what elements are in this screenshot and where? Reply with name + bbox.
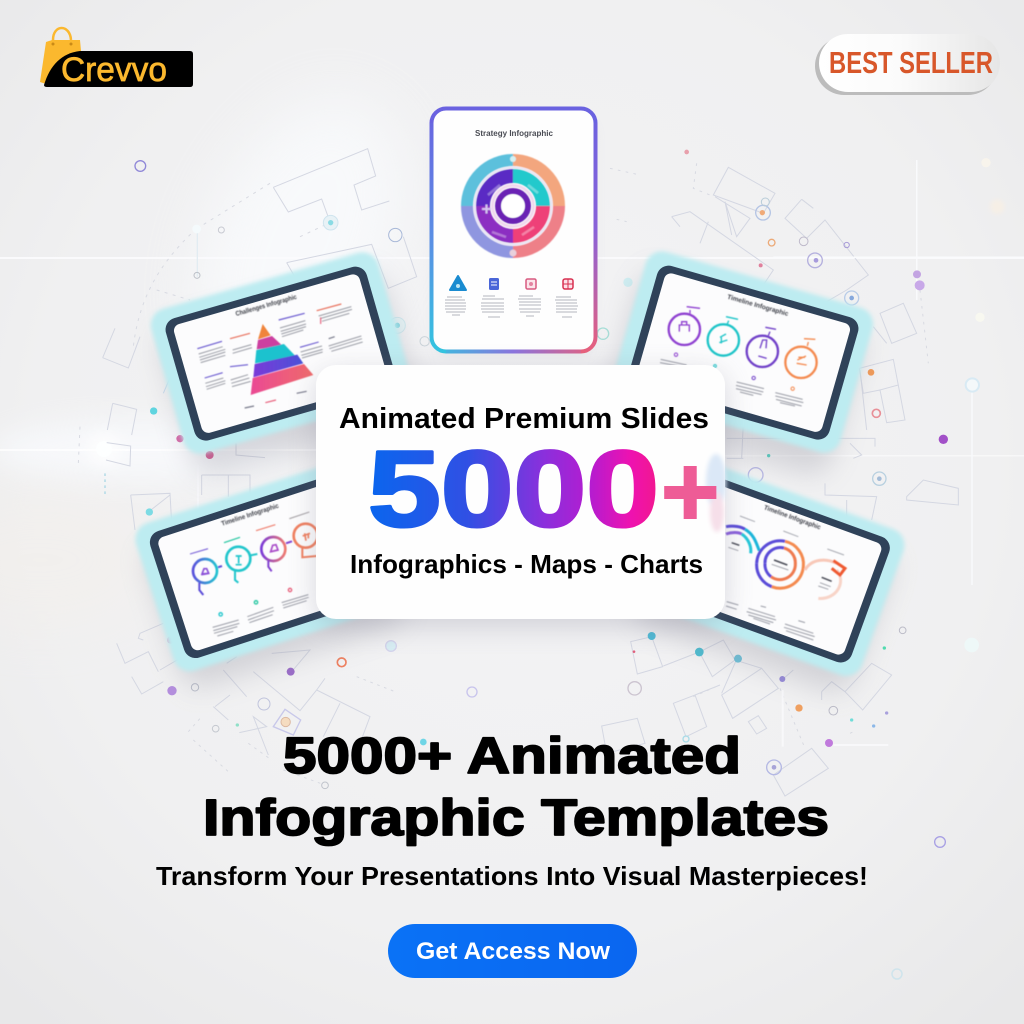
icon: calendar xyxy=(526,279,536,289)
tablet: spiral infographic (bottom right) xyxy=(628,454,909,697)
tablet: timeline infographic (top right) xyxy=(602,247,877,479)
slide title: Timeline Infographic xyxy=(763,504,822,532)
scattered node: lower right ring xyxy=(892,969,902,979)
icon: triangle xyxy=(450,276,466,290)
network diagram: lower left xyxy=(117,623,477,789)
pyramid chart xyxy=(251,324,313,395)
slide title: Challenges Infographic xyxy=(235,294,298,318)
card heading: Animated Premium Slides xyxy=(339,403,709,435)
big number 5000+ xyxy=(368,428,719,549)
phone text columns xyxy=(445,296,578,317)
headline xyxy=(203,727,829,846)
network diagram: upper right xyxy=(597,150,1024,520)
phone card: strategy infographic xyxy=(432,108,596,356)
slide title: Timeline Infographic xyxy=(221,503,280,528)
slide title: Timeline Infographic xyxy=(726,294,789,318)
card subheading: Infographics - Maps - Charts xyxy=(350,549,703,579)
donut chart xyxy=(467,156,559,256)
icon: document xyxy=(489,278,499,290)
subtitle: Transform Your Presentations Into Visual Masterpieces! xyxy=(156,861,868,891)
icon: grid xyxy=(563,279,573,289)
logo: Crevvo xyxy=(40,28,193,89)
spiral rings chart xyxy=(726,526,845,598)
network diagram: upper left xyxy=(78,149,429,530)
headline: Infographic Templates xyxy=(203,789,829,846)
big number 5000+: 5000 xyxy=(368,428,659,549)
badge: best seller xyxy=(815,34,1000,95)
process rings xyxy=(193,524,318,583)
blue-pink blob xyxy=(706,454,726,532)
main card xyxy=(316,365,726,626)
button: get access now: Get Access Now xyxy=(416,938,610,965)
timeline rings xyxy=(669,314,817,378)
big number 5000+: + xyxy=(661,436,719,548)
logo: Crevvo: Crevvo xyxy=(61,51,167,89)
headline: 5000+ Animated xyxy=(283,727,741,784)
button: get access now xyxy=(388,924,637,978)
tablet: pyramid infographic xyxy=(147,248,421,479)
phone title: Strategy Infographic xyxy=(475,128,553,138)
tablet: process infographic (bottom left) xyxy=(131,455,408,692)
network diagram: lower right xyxy=(602,627,979,847)
